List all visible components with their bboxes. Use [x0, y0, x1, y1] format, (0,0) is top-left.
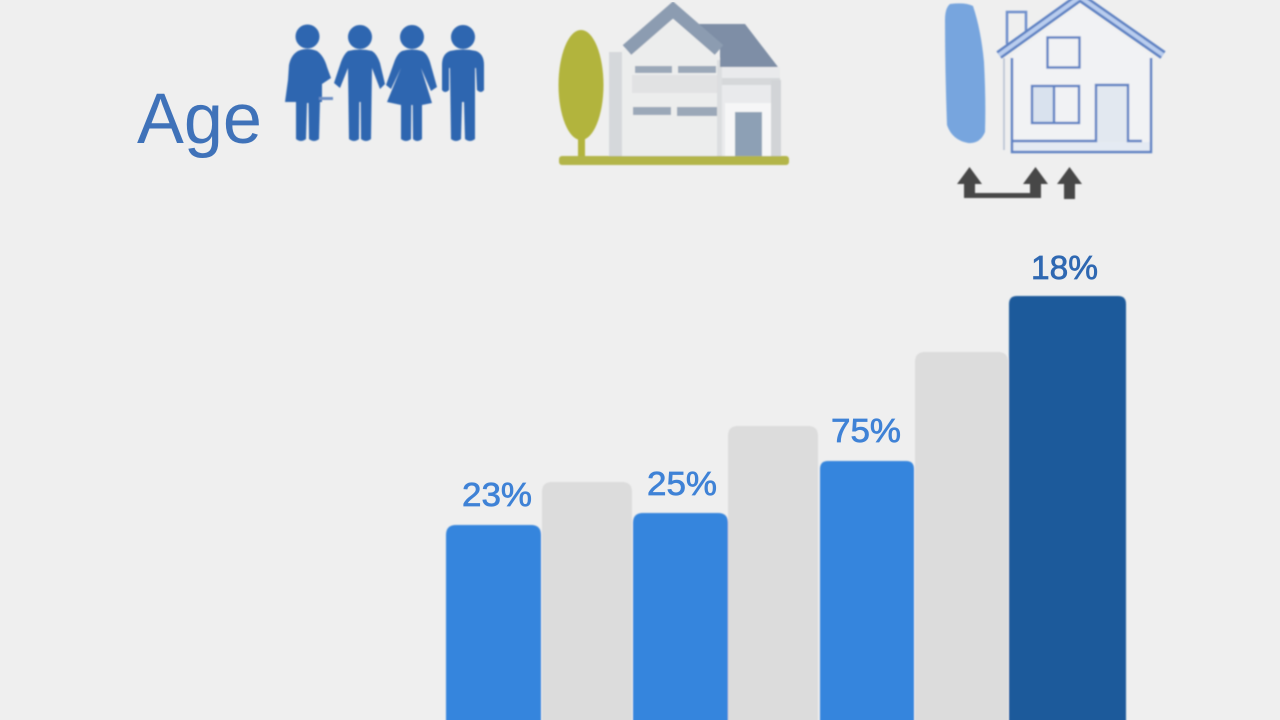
bar: grey 3	[915, 352, 1008, 720]
label: 75%: 75%	[831, 412, 901, 449]
icon: detached house with tree	[558, 10, 789, 165]
icon: tree	[558, 30, 604, 159]
windows	[633, 66, 717, 116]
door	[1096, 85, 1128, 142]
right roof	[697, 24, 778, 67]
icon: person with cape	[285, 24, 333, 141]
blue blob tree	[945, 3, 985, 143]
label: 25%: 25%	[647, 465, 717, 502]
main gable roof	[627, 10, 719, 50]
icon: group of four people	[285, 24, 484, 141]
door	[735, 112, 762, 156]
roof	[999, 0, 1163, 55]
ground	[559, 156, 789, 165]
chimney	[1007, 12, 1026, 44]
icon: outlined house with blue shape	[945, 0, 1163, 152]
icon: woman in dress	[386, 25, 437, 141]
icon: three up arrows	[957, 167, 1082, 199]
bar: grey 1	[542, 482, 632, 720]
bar chart	[446, 296, 1126, 720]
bar: dark blue 18%	[1009, 296, 1126, 720]
bar: blue 25%	[633, 513, 728, 720]
house outline	[1004, 38, 1151, 152]
label: 23%: 23%	[462, 476, 532, 513]
icon: man standing	[442, 25, 484, 141]
house fill	[1012, 5, 1151, 152]
label: 18%: 18%	[1031, 249, 1098, 286]
bar: blue 23%	[446, 525, 541, 720]
bar: blue 75%	[820, 461, 914, 720]
window lower left pane	[1032, 86, 1055, 123]
icon: man with angled arms	[334, 25, 385, 141]
heading: Age: Age	[137, 80, 262, 159]
house walls	[609, 20, 781, 156]
bar: grey 2	[728, 426, 818, 720]
